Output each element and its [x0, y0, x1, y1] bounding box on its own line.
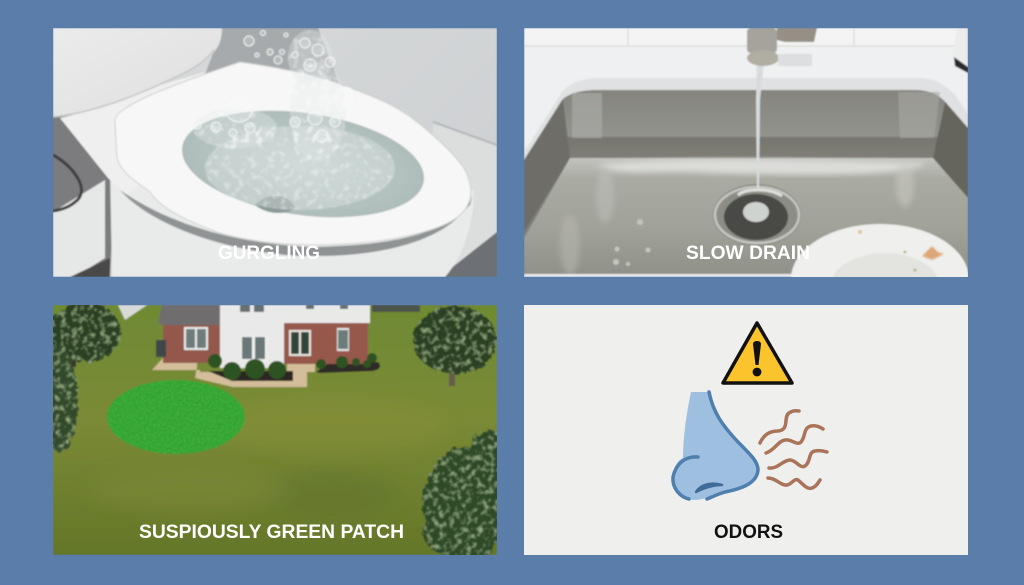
- icon: nose: [673, 392, 758, 500]
- panel: odors: [524, 305, 968, 555]
- panel: suspiciously green patch lawn: [42, 302, 510, 563]
- label: odors: ODORS: [714, 522, 783, 543]
- panel: slow drain sink: [524, 28, 968, 277]
- label: green patch: SUSPIOUSLY GREEN PATCH: [139, 522, 404, 543]
- label: slow drain: SLOW DRAIN: [686, 243, 810, 264]
- panel: gurgling toilet: [53, 28, 497, 277]
- label: gurgling: GURGLING: [218, 243, 320, 264]
- icon: warning triangle: [723, 323, 792, 383]
- icon: odor waves: [760, 411, 827, 488]
